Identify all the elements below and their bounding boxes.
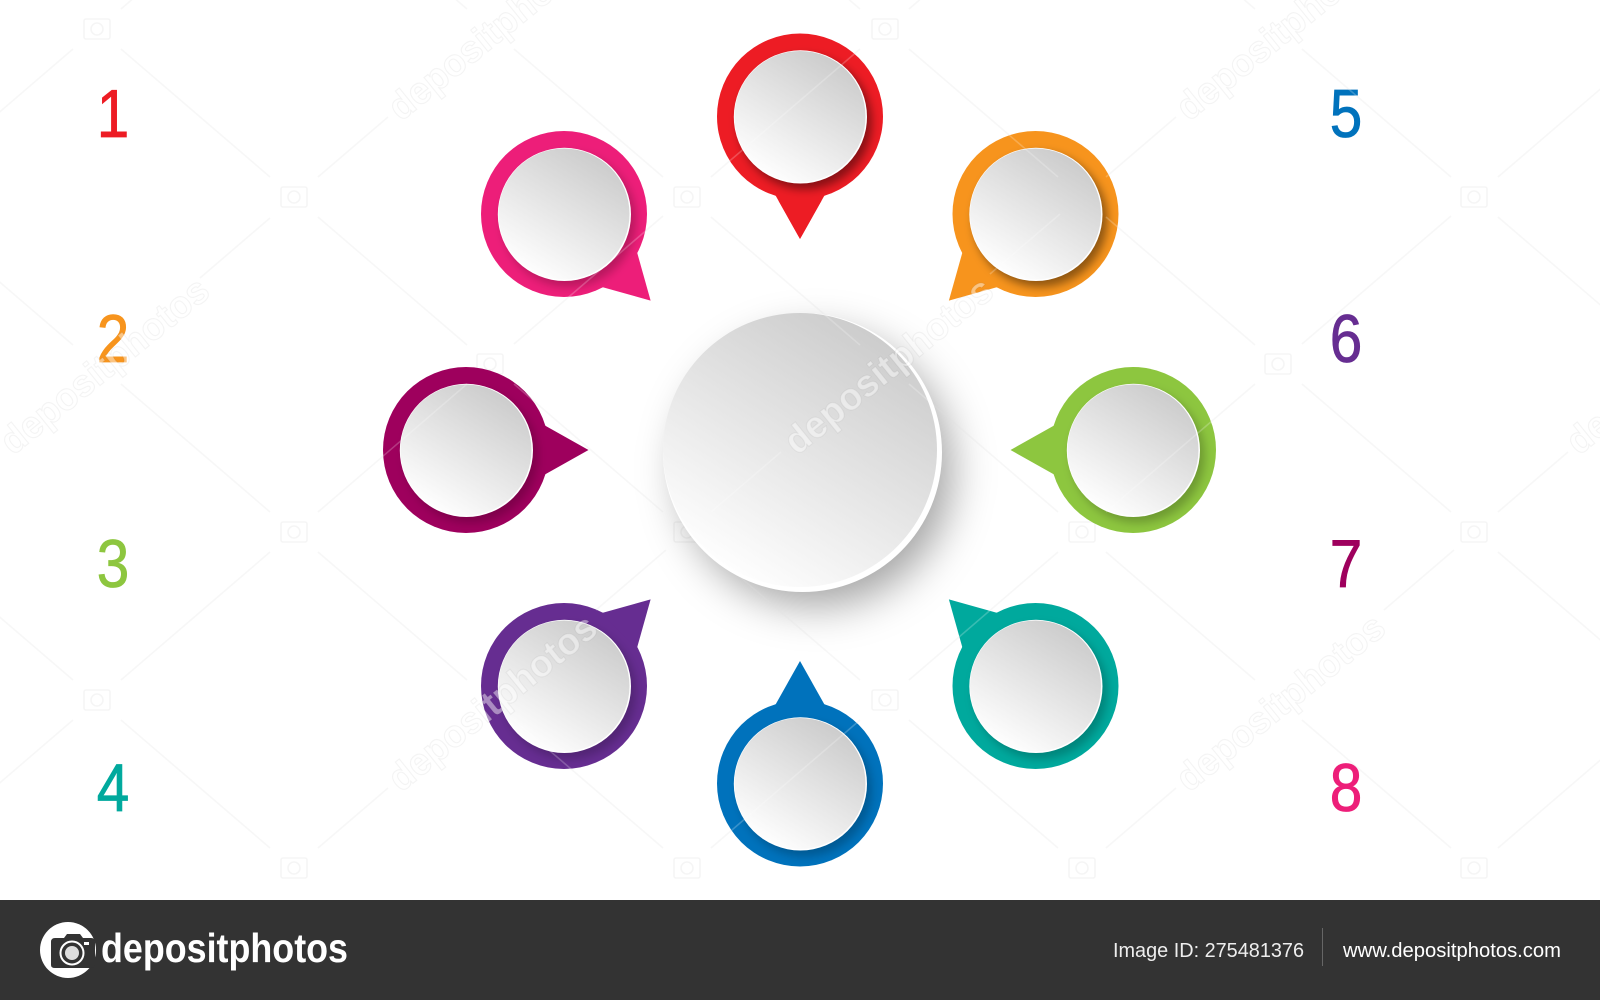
- watermark overlay: depositphotos: [380, 606, 606, 800]
- watermark overlay: depositphotos: [776, 269, 1002, 463]
- image id: Image ID: 275481376: [1113, 940, 1304, 962]
- right column numbers: [1330, 77, 1362, 826]
- right column numbers: 5: [1330, 77, 1362, 152]
- left column numbers: [97, 77, 129, 826]
- right column numbers: 7: [1330, 527, 1362, 602]
- pin 4: teal, bottom right: [948, 599, 1118, 769]
- pin 3: green, right: [1010, 367, 1216, 533]
- right column numbers: 8: [1330, 751, 1362, 826]
- footer divider: [1322, 928, 1323, 966]
- pin 8: pink, top left: [481, 131, 651, 301]
- left column numbers: 3: [97, 527, 129, 602]
- website url: www.depositphotos.com: [1342, 940, 1561, 962]
- left column numbers: 1: [97, 77, 129, 152]
- logo wordmark: depositphotos: [101, 925, 348, 971]
- watermark overlay: depositphotos: [1168, 606, 1394, 800]
- pin 2: orange, top right: [948, 131, 1118, 301]
- left column numbers: 4: [97, 751, 129, 826]
- pin 1: red, top: [717, 34, 883, 239]
- panel: central disc: [663, 313, 952, 606]
- footer bar: [0, 900, 1600, 1000]
- icon: camera logo: [40, 922, 96, 978]
- pin 7: maroon, left: [383, 367, 588, 533]
- right column numbers: 6: [1330, 302, 1362, 377]
- pin 5: blue, bottom: [717, 661, 883, 866]
- left column numbers: 2: [97, 302, 129, 377]
- pin 6: purple, bottom left: [481, 599, 651, 769]
